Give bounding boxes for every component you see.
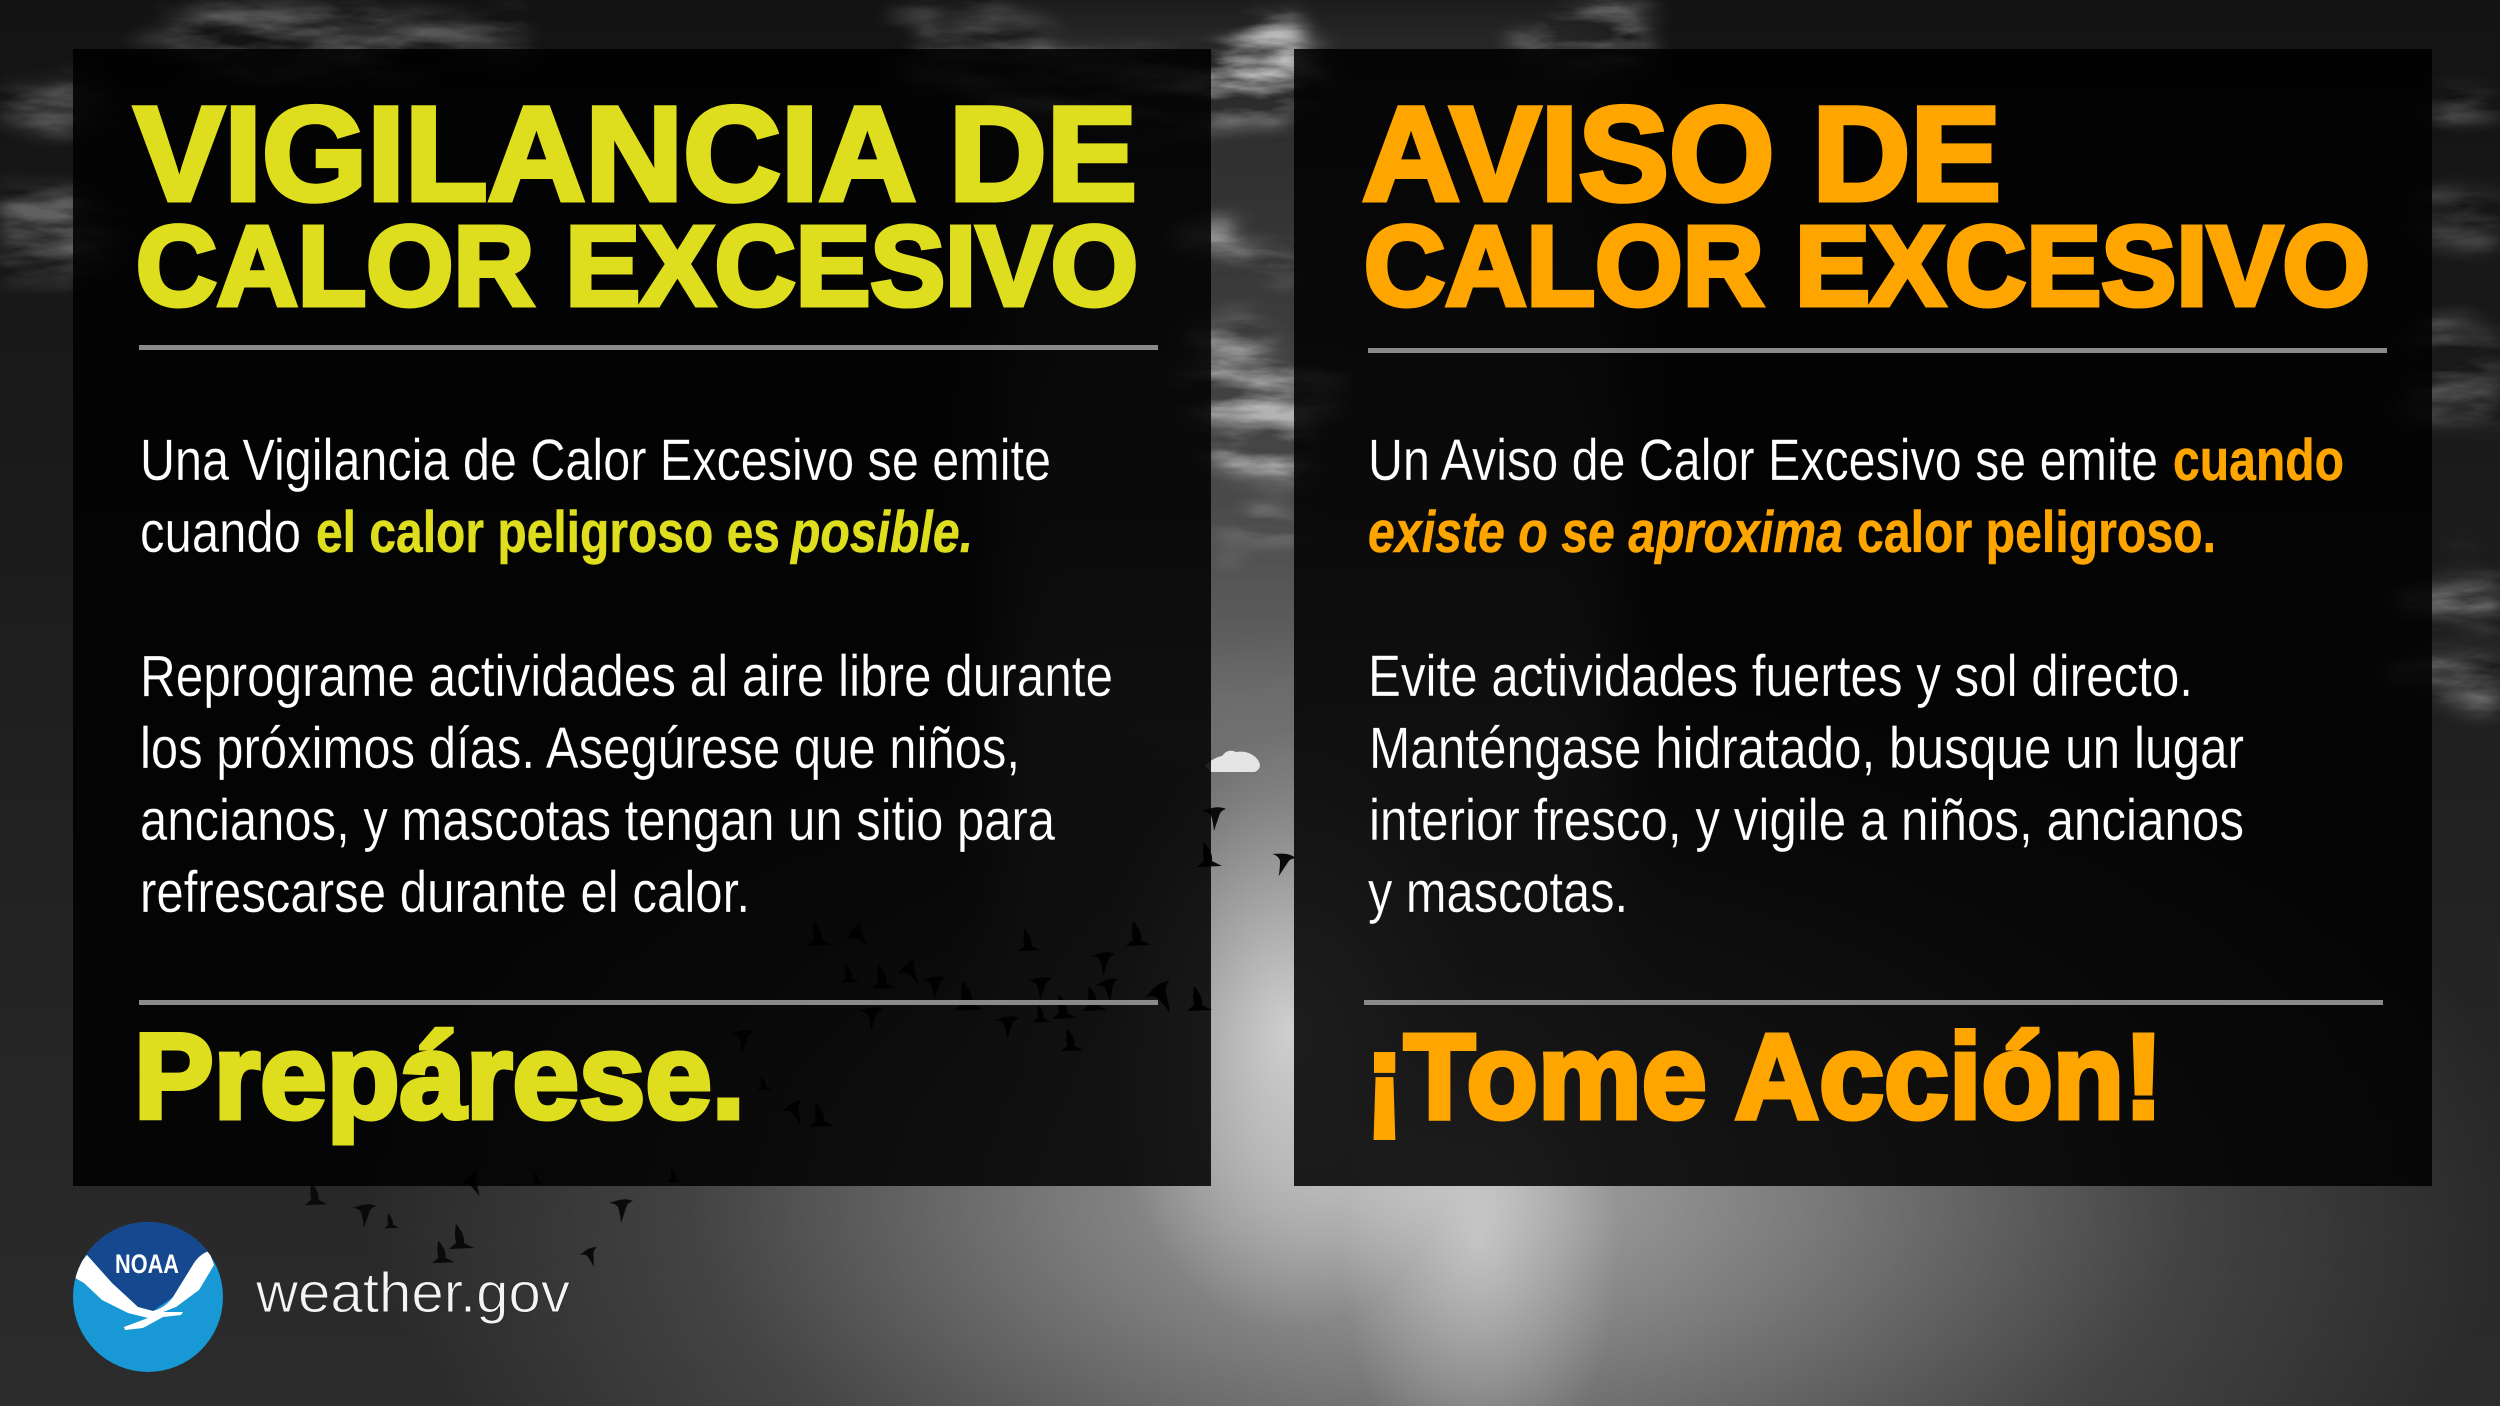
text: recommendation: ancianos, y mascotas tengan un sitio para bbox=[140, 788, 1056, 853]
text: recommendation: y mascotas. bbox=[1368, 860, 1628, 925]
call to action: tome acción: ¡Tome Acción! bbox=[1365, 1008, 2163, 1144]
text: definition: cuando bbox=[2173, 428, 2344, 493]
panel: vigilancia de calor excesivo bbox=[73, 49, 1211, 1186]
text: definition: Una Vigilancia de Calor Excesivo se emite bbox=[140, 428, 1051, 493]
text: definition: el calor peligroso es bbox=[316, 500, 780, 565]
text: recommendation bbox=[1368, 644, 2244, 925]
icon: NOAA logo: NOAA bbox=[115, 1249, 179, 1279]
text: definition bbox=[1368, 428, 2344, 565]
website label: weather.gov bbox=[255, 1261, 570, 1325]
icon: NOAA logo bbox=[73, 1222, 223, 1372]
heading: vigilancia: CALOR EXCESIVO bbox=[136, 203, 1138, 329]
text: recommendation: Manténgase hidratado, busque un lugar bbox=[1369, 716, 2244, 781]
text: recommendation: Evite actividades fuertes y sol directo. bbox=[1368, 644, 2193, 709]
heading: aviso: AVISO DE bbox=[1362, 80, 2001, 229]
text: definition: cuando bbox=[140, 500, 301, 565]
heading: aviso: CALOR EXCESIVO bbox=[1364, 203, 2370, 329]
heading: aviso bbox=[1362, 80, 2370, 329]
text: definition: posible. bbox=[789, 500, 973, 565]
text: recommendation: interior fresco, y vigile a niños, ancianos bbox=[1369, 788, 2244, 853]
heading: vigilancia bbox=[134, 80, 1138, 329]
text: definition: calor peligroso. bbox=[1857, 500, 2216, 565]
text: definition bbox=[140, 428, 1051, 565]
text: recommendation: refrescarse durante el calor. bbox=[140, 860, 750, 925]
flock of birds bbox=[305, 807, 1296, 1270]
text: definition: Un Aviso de Calor Excesivo se emite bbox=[1368, 428, 2158, 493]
text: recommendation bbox=[140, 644, 1113, 925]
call to action: prepárese: Prepárese. bbox=[134, 1008, 745, 1144]
text: definition: existe o se aproxima bbox=[1368, 500, 1843, 565]
text: recommendation: Reprograme actividades al aire libre durante bbox=[140, 644, 1113, 709]
heading: vigilancia: VIGILANCIA DE bbox=[134, 80, 1137, 229]
text: recommendation: los próximos días. Asegúrese que niños, bbox=[140, 716, 1020, 781]
panel: aviso de calor excesivo bbox=[1294, 49, 2432, 1186]
